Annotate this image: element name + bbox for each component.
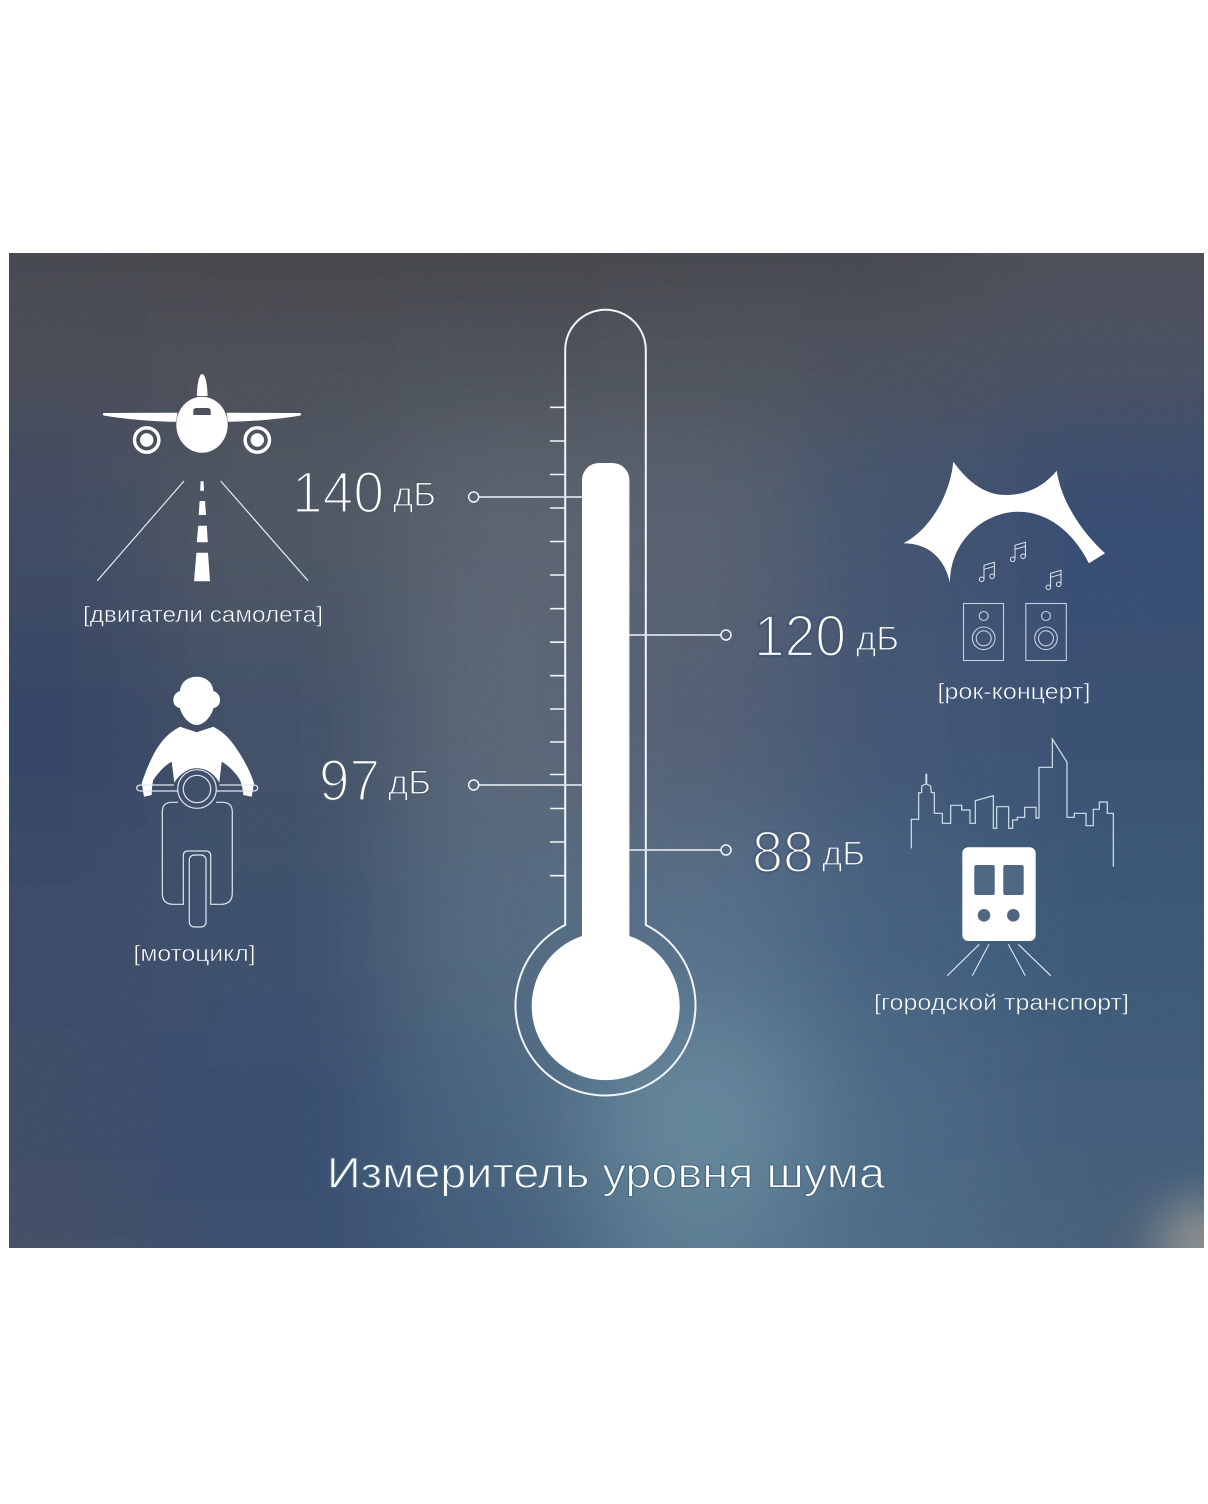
- thermometer outline: [516, 310, 696, 1095]
- value: 120 dB: дБ: [856, 620, 899, 658]
- label: motorcycle: [мотоцикл]: [134, 941, 256, 966]
- value: 140 dB: [292, 460, 436, 526]
- scooter: [137, 770, 258, 927]
- icon: airplane on runway: [97, 374, 308, 581]
- value: 88 dB: 88: [752, 820, 814, 885]
- thermometer: [516, 310, 696, 1095]
- city skyline: [911, 739, 1113, 867]
- rider: [142, 677, 254, 797]
- value: 120 dB: [754, 604, 899, 669]
- label: city transport: [городской транспорт]: [874, 990, 1129, 1015]
- icon: motorcyclist: [137, 677, 258, 927]
- value: 97 dB: дБ: [388, 764, 431, 802]
- airplane: [103, 374, 301, 453]
- value: 120 dB: 120: [754, 604, 846, 669]
- rails: [947, 944, 1051, 976]
- title: Измеритель уровня шума: [327, 1150, 885, 1198]
- thermometer mercury column: [532, 463, 680, 1080]
- runway: [97, 481, 308, 581]
- label: aircraft engines: [двигатели самолета]: [83, 602, 323, 627]
- thermometer scale ticks: [550, 407, 565, 876]
- connector: 97 dB: [469, 780, 582, 790]
- value: 88 dB: [752, 820, 865, 885]
- panel: gradient background: [9, 253, 1204, 1248]
- value: 97 dB: 97: [319, 748, 380, 814]
- speakers: [964, 604, 1066, 660]
- value: 88 dB: дБ: [822, 835, 865, 873]
- icon: city transport: [911, 739, 1113, 976]
- value: 140 dB: дБ: [393, 476, 436, 514]
- music notes: [979, 542, 1061, 590]
- train front: [962, 847, 1036, 941]
- value: 97 dB: [319, 748, 431, 814]
- connector: 140 dB: [469, 492, 582, 502]
- label: rock concert: [рок-концерт]: [938, 679, 1090, 704]
- stage canopy: [903, 462, 1105, 583]
- connector: 120 dB: [629, 630, 731, 640]
- value: 140 dB: 140: [292, 460, 384, 526]
- icon: rock concert: [903, 462, 1105, 660]
- connector: 88 dB: [629, 845, 731, 855]
